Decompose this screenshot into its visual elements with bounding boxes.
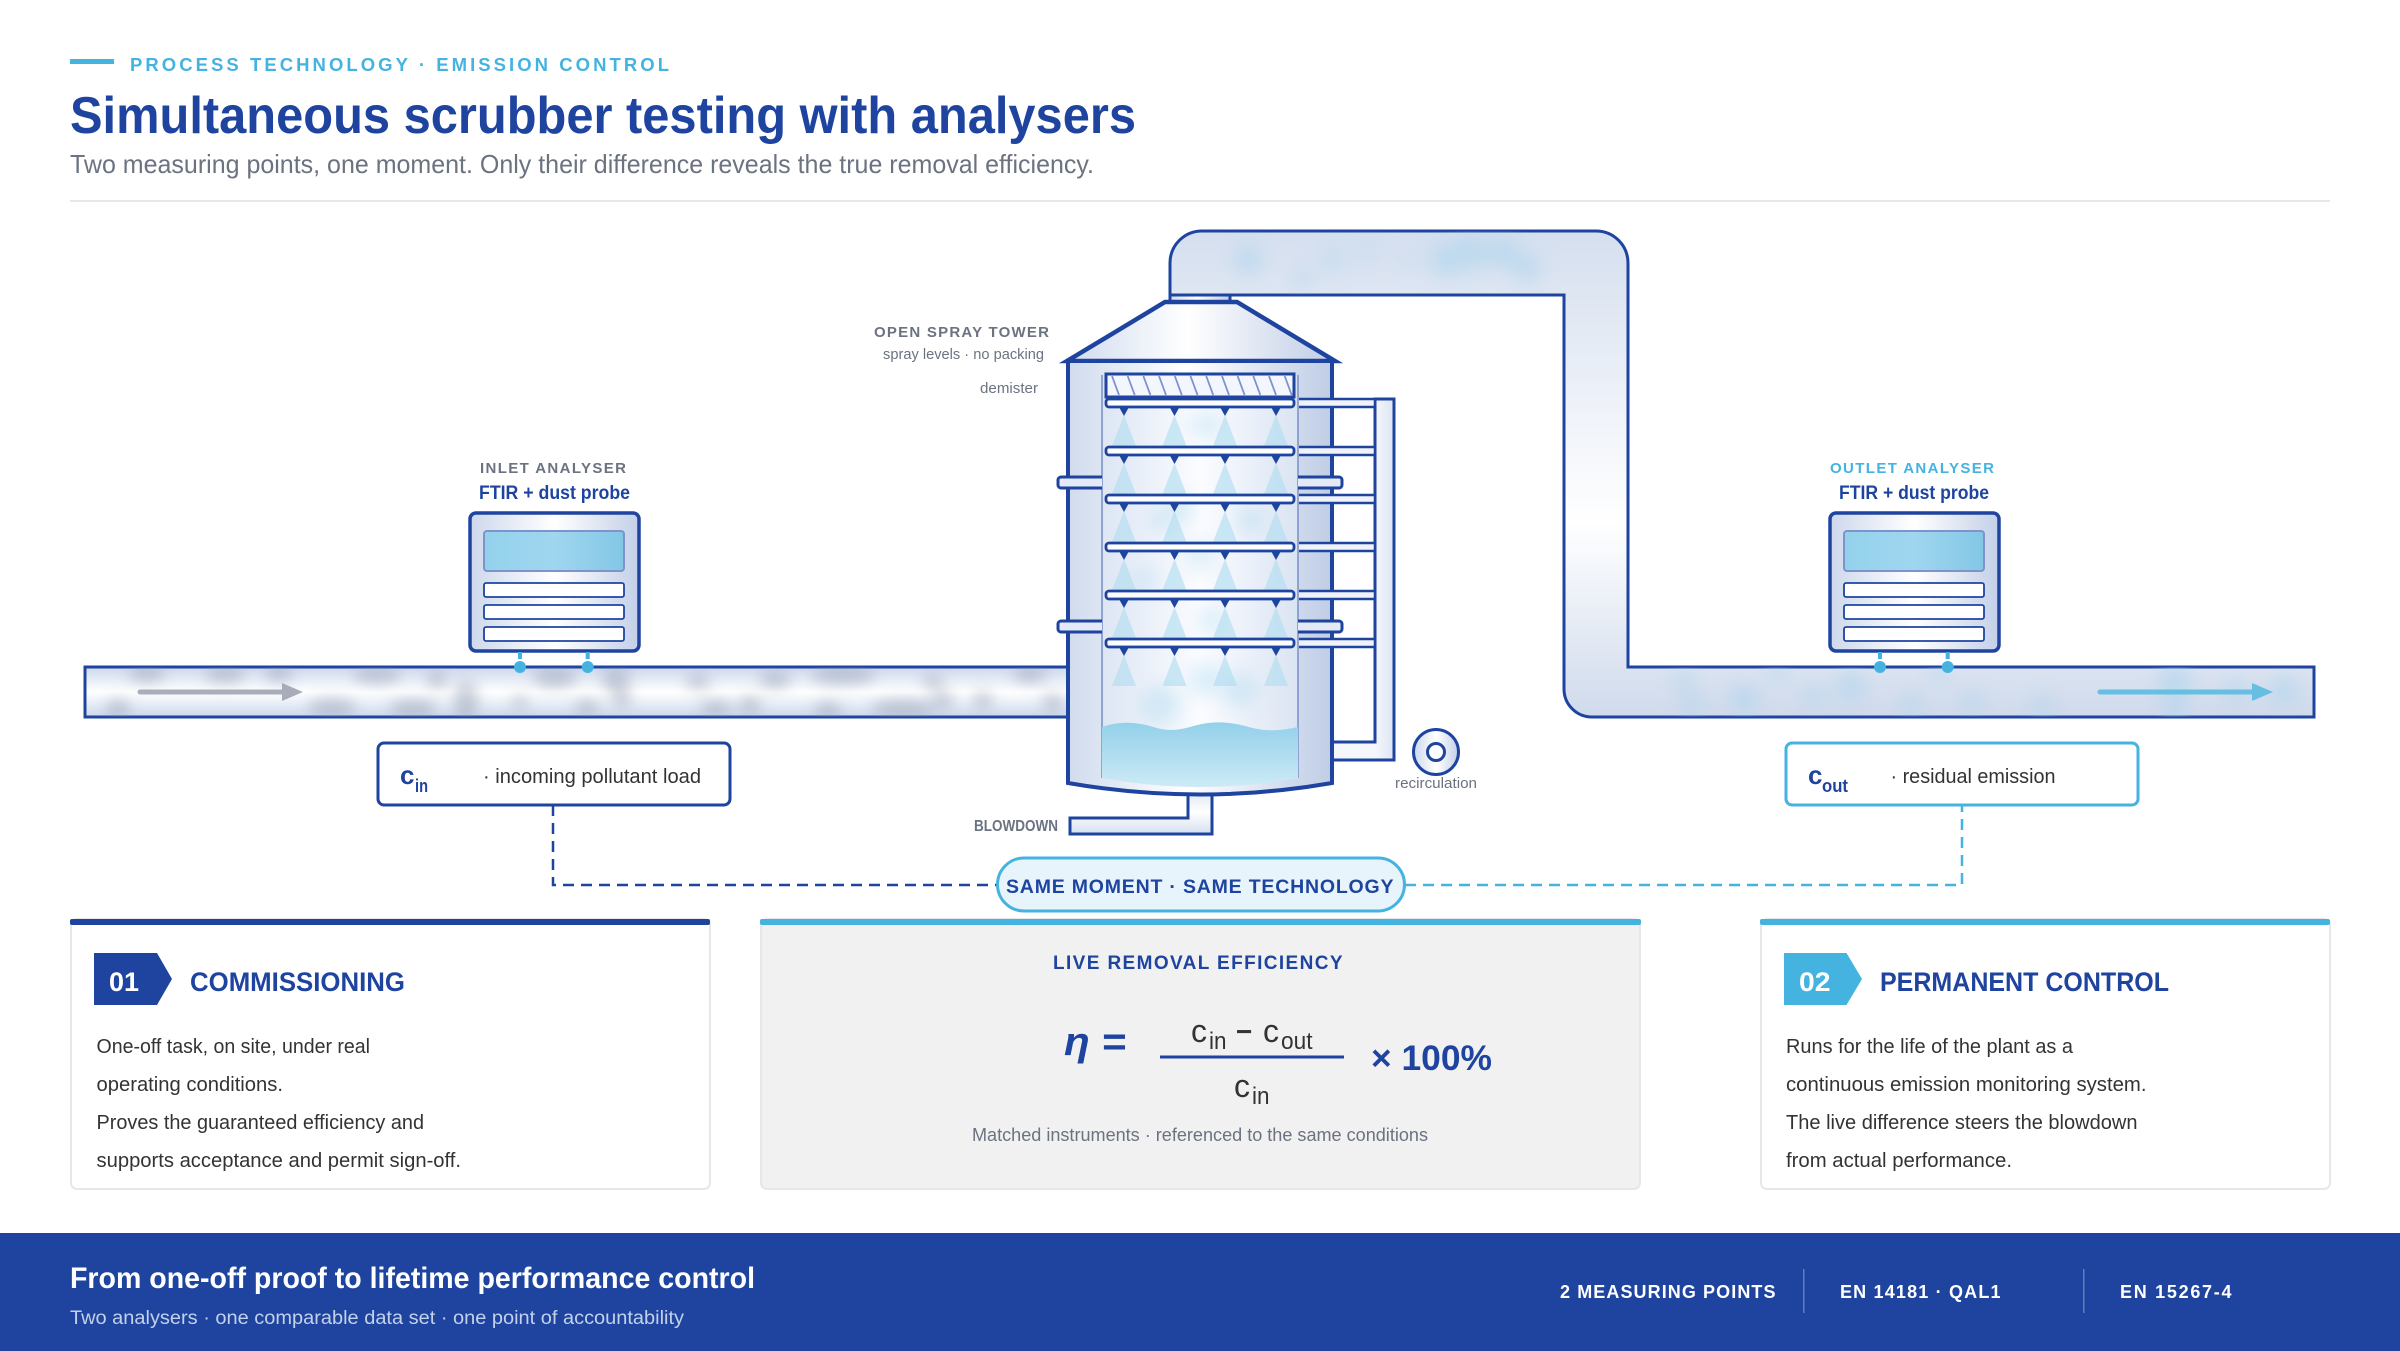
outlet analyser cabinet	[1830, 513, 1999, 659]
inlet analyser cabinet	[470, 513, 639, 659]
body text: from actual performance.	[1786, 1150, 2012, 1172]
recirculation branches	[1299, 399, 1375, 647]
stat: measuring points: 2 MEASURING POINTS	[1560, 1282, 1777, 1302]
icon: recirculation pump	[1414, 730, 1458, 774]
badge 02: 02	[1799, 967, 1830, 997]
title: Simultaneous scrubber testing with analysers	[70, 87, 1136, 145]
spray nozzles and cones	[1112, 407, 1288, 686]
inlet instrument type: FTIR + dust probe	[479, 483, 630, 504]
body text: supports acceptance and permit sign-off.	[96, 1150, 461, 1172]
label: spray levels: spray levels · no packing	[883, 346, 1044, 363]
inlet label: INLET ANALYSER	[480, 460, 628, 477]
formula: out	[1281, 1028, 1313, 1055]
label: blowdown: BLOWDOWN	[974, 818, 1058, 835]
outlet sampling points	[1874, 661, 1954, 673]
body text	[1786, 1036, 2146, 1172]
heading: COMMISSIONING	[190, 967, 405, 997]
formula: c	[1234, 1068, 1250, 1104]
callout: c out: · residual emission	[1890, 766, 2056, 788]
callout: c in: c	[400, 760, 414, 790]
spray zone	[1102, 375, 1298, 787]
heading: PERMANENT CONTROL	[1880, 967, 2169, 997]
callout: c in: in	[415, 776, 428, 796]
badge 02	[1784, 953, 1862, 1005]
label: open spray tower: OPEN SPRAY TOWER	[874, 324, 1051, 341]
stack connection	[1170, 295, 1230, 303]
pill: same moment same technology	[998, 858, 1404, 911]
inlet sampling points	[514, 661, 594, 673]
body text: continuous emission monitoring system.	[1786, 1074, 2146, 1096]
formula: η =	[1064, 1020, 1126, 1064]
subtitle: Two measuring points, one moment. Only their difference reveals the true removal efficiency.	[70, 149, 1094, 179]
connector: inlet to pill	[553, 805, 997, 885]
spray tower	[1058, 302, 1375, 794]
footer subtitle: Two analysers · one comparable data set · one point of accountability	[70, 1308, 685, 1329]
formula: in	[1209, 1028, 1226, 1055]
outlet analyser	[1830, 460, 1999, 673]
diagram: scrubber process	[85, 231, 2314, 911]
body text: Runs for the life of the plant as a	[1786, 1036, 2074, 1058]
panel: live removal efficiency	[760, 919, 1641, 1189]
formula: × 100%	[1371, 1039, 1492, 1078]
badge 01: 01	[109, 967, 139, 997]
inlet flow arrow	[140, 683, 303, 701]
formula: c	[1191, 1013, 1207, 1049]
side stubs	[1058, 477, 1342, 632]
stat: EN 14181: EN 14181 · QAL1	[1840, 1282, 2002, 1302]
spray headers	[1106, 399, 1294, 647]
vessel shell	[1068, 361, 1332, 794]
scrubber liquid sump	[1102, 722, 1298, 787]
stat: EN 15267: EN 15267-4	[2120, 1282, 2233, 1302]
panel: permanent control	[1760, 919, 2330, 1189]
eyebrow: PROCESS TECHNOLOGY · EMISSION CONTROL	[130, 54, 672, 75]
body text: One-off task, on site, under real	[96, 1036, 370, 1058]
blowdown pipe	[1070, 790, 1212, 834]
formula: c	[1263, 1013, 1279, 1049]
body text: Proves the guaranteed efficiency and	[96, 1112, 424, 1134]
header	[70, 54, 1136, 179]
outlet label: OUTLET ANALYSER	[1830, 460, 1996, 477]
outlet flow arrow	[2100, 683, 2273, 701]
pill: same moment same technology: SAME MOMENT · SAME TECHNOLOGY	[1006, 876, 1395, 898]
outlet instrument type: FTIR + dust probe	[1839, 483, 1989, 504]
formula	[1064, 1013, 1492, 1110]
connector: outlet to pill	[1405, 805, 1962, 885]
label: demister: demister	[980, 380, 1038, 397]
accent bar	[70, 59, 114, 64]
inlet duct	[85, 666, 1068, 720]
body text: The live difference steers the blowdown	[1786, 1112, 2138, 1134]
callout: c out	[1786, 743, 2138, 805]
body text	[96, 1036, 461, 1172]
formula: in	[1252, 1083, 1270, 1110]
body text: operating conditions.	[96, 1074, 283, 1096]
callout: c out: out	[1822, 776, 1848, 796]
callout: c in	[378, 743, 730, 805]
footer band	[0, 1233, 2400, 1352]
badge 01	[94, 953, 172, 1005]
formula: −	[1236, 1016, 1252, 1047]
caption: Matched instruments · referenced to the same conditions	[972, 1125, 1428, 1145]
panel: commissioning	[70, 919, 710, 1189]
callout: c in: · incoming pollutant load	[483, 766, 701, 788]
callout: c out: c	[1808, 760, 1822, 790]
label: recirculation: recirculation	[1395, 775, 1477, 792]
inlet analyser	[470, 460, 639, 673]
demister	[1106, 374, 1294, 397]
recirculation riser	[1320, 399, 1394, 760]
footer title: From one-off proof to lifetime performance control	[70, 1262, 755, 1295]
tower cap	[1067, 302, 1335, 361]
clean gas duct	[1170, 231, 2314, 719]
heading: LIVE REMOVAL EFFICIENCY	[1053, 953, 1345, 974]
